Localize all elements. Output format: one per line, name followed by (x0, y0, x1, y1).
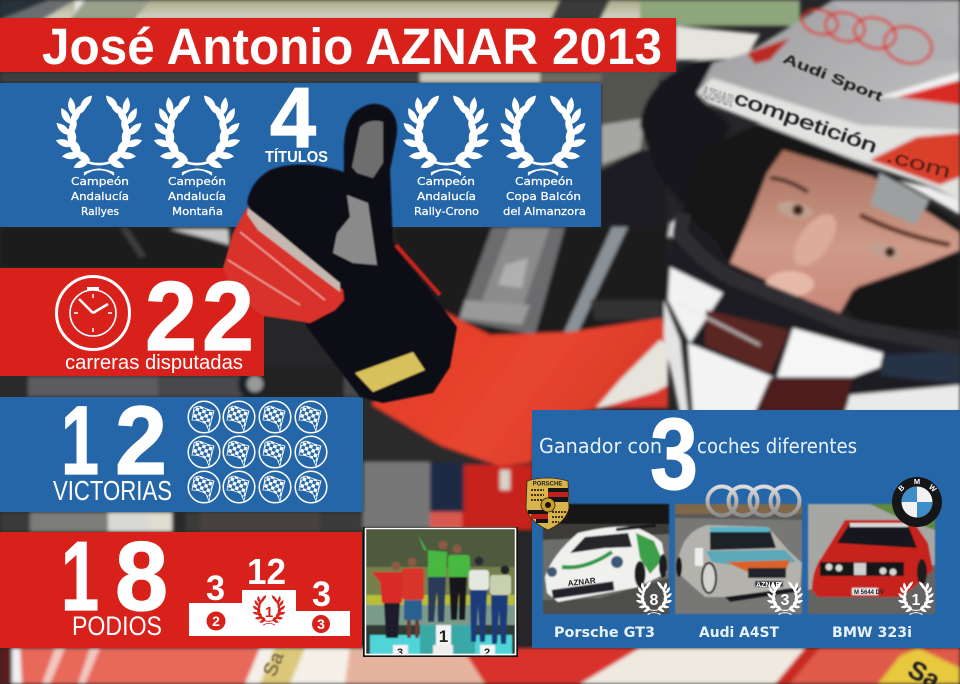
icon: Audi rings (708, 486, 800, 516)
palm grip pad (333, 195, 377, 265)
big number 18 (61, 521, 168, 631)
badge: 3 wins: 3 (781, 592, 790, 609)
pale pillar right of title panel (601, 72, 660, 170)
driver's glove: thumbs up (223, 104, 457, 403)
red cuff (223, 207, 344, 323)
podium chart: 3 (206, 569, 225, 608)
wreath: Andalucía Rallyes (55, 94, 143, 218)
big number 12: 2 (115, 386, 167, 495)
red visor rings (800, 6, 936, 69)
heading: Ganador con 3 coches diferentes: 3 (650, 399, 698, 511)
podium chart (189, 551, 350, 636)
caption: VICTORIAS: VICTORIAS (53, 475, 172, 506)
badge: 1 win: 1 (912, 592, 921, 609)
photo: Porsche GT3: AZNAR (567, 576, 596, 588)
big number 18: 1 (61, 521, 99, 631)
caption: PODIOS: PODIOS (72, 611, 162, 641)
photo: BMW 323i (808, 504, 935, 615)
icon: BMW roundel: M (914, 477, 920, 486)
visor lettering: AZNAR (699, 84, 735, 110)
icon: Porsche crest (526, 478, 569, 530)
wreath: Andalucía Montaña: Andalucía (168, 190, 226, 203)
wreath: Andalucía Rallyes: Rallyes (81, 205, 119, 218)
chin cushion (847, 253, 960, 330)
icon: BMW roundel: B (896, 483, 907, 493)
icon: BMW roundel (892, 477, 942, 527)
face (730, 150, 960, 313)
heading: Ganador con 3 coches diferentes: Ganador con (539, 434, 662, 458)
icon: BMW roundel: W (927, 482, 939, 494)
wreath: Copa Balcón del Almanzora: Copa Balcón (506, 190, 581, 203)
podium chart: 12 (247, 551, 286, 592)
panel: 22 races background (0, 268, 264, 376)
wreath: Copa Balcón del Almanzora: Campeón (515, 175, 573, 188)
car name labels (554, 625, 912, 641)
car name labels: Porsche GT3 (554, 625, 655, 641)
wreath: Copa Balcón del Almanzora (499, 94, 587, 218)
visor (697, 0, 960, 200)
big number 22: 2 (145, 261, 197, 371)
icon: stopwatch (56, 276, 130, 350)
photo: Audi A4ST: AZNAR (756, 582, 780, 589)
photo: Porsche GT3 (543, 504, 673, 615)
wreath: Andalucía Montaña: Campeón (168, 175, 226, 188)
dark cockpit left (0, 227, 230, 268)
helmet liner (683, 120, 960, 310)
visor lettering: Audi Sport (781, 50, 886, 105)
wreath: Andalucía Rallyes: Campeón (71, 175, 129, 188)
engine bay below arm (363, 400, 533, 530)
helmet rim (680, 213, 960, 347)
big number 12 (61, 386, 167, 495)
top window view (0, 0, 800, 83)
wreath: Andalucía Rally-Crono (402, 94, 490, 218)
big number 18: 8 (115, 521, 168, 631)
car name labels: BMW 323i (832, 625, 912, 641)
podium placard numbers (397, 627, 490, 659)
podium placard numbers: 2 (484, 647, 490, 659)
wreath: Andalucía Rally-Crono: Andalucía (417, 190, 476, 203)
heading: Ganador con 3 coches diferentes (539, 399, 857, 511)
bottom strip of suit (0, 648, 960, 684)
photo: podium team (363, 527, 518, 659)
red seam (396, 245, 440, 295)
team members (372, 535, 511, 644)
badge: 8 wins: 8 (650, 592, 659, 609)
wreath: Copa Balcón del Almanzora: del Almanzora (503, 205, 586, 218)
glove body (247, 104, 457, 403)
visor lettering: competición (731, 88, 880, 158)
visor lettering: .com (884, 146, 953, 183)
big number 22 (145, 261, 254, 371)
icons: checkered flags (188, 401, 327, 503)
caption: carreras disputadas: carreras disputadas (65, 352, 243, 374)
wreath: Andalucía Rally-Crono: Rally-Crono (414, 205, 479, 218)
podium chart: 3 (312, 575, 331, 614)
racing suit sleeve (372, 312, 668, 466)
icon: Porsche crest: PORSCHE (533, 482, 562, 488)
panel: 18 podiums (0, 521, 362, 648)
wreath: Andalucía Montaña: Montaña (172, 205, 223, 218)
car name labels: Audi A4ST (699, 625, 779, 641)
podium chart: 3 (317, 616, 325, 632)
wreath: Andalucía Rally-Crono: Campeón (417, 175, 475, 188)
panel: 4 titles (0, 71, 601, 227)
thumb grip pad (352, 121, 383, 178)
black headrest (640, 58, 735, 205)
big number 12: 1 (61, 386, 99, 495)
podium placard numbers: 3 (397, 647, 403, 659)
big number 22: 2 (202, 261, 254, 371)
helmet shell with checks (664, 210, 960, 420)
visor lettering (259, 50, 953, 684)
yellow glove label (355, 352, 425, 392)
heading: Ganador con 3 coches diferentes: coches diferentes (697, 434, 857, 458)
podium chart: 2 (212, 613, 220, 629)
panel: 12 victories (0, 386, 363, 512)
caption: TÍTULOS: TÍTULOS (265, 147, 328, 166)
title banner: José Antonio AZNAR 2013 (42, 18, 662, 75)
photo: Audi A4ST (675, 504, 804, 615)
wreath: Andalucía Rallyes: Andalucía (71, 190, 129, 203)
visor lettering: Sa (259, 648, 289, 680)
photo: BMW 323i: M 5644 DV (854, 590, 884, 596)
podium placard numbers: 1 (439, 627, 448, 646)
podium chart: 1 (265, 604, 273, 621)
panel: winner with 3 cars (532, 399, 960, 648)
big number 4: 4 (270, 71, 316, 166)
wreath: Andalucía Montaña (153, 94, 241, 218)
door pillar (395, 227, 665, 337)
